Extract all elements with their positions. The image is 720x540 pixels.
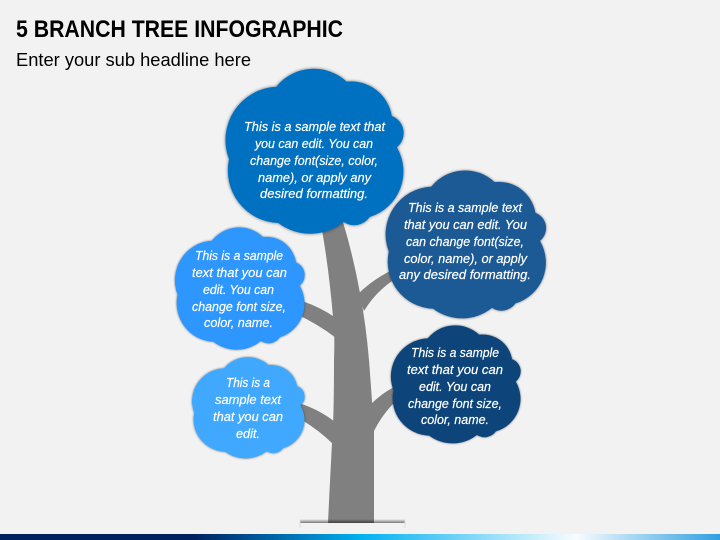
ground base bbox=[300, 519, 406, 528]
cloud text: upper right bbox=[399, 201, 531, 282]
cloud text: top: you can edit. You can bbox=[254, 137, 373, 151]
cloud text: lower right: change font size, bbox=[408, 397, 502, 411]
cloud text: upper right: any desired formatting. bbox=[399, 268, 531, 282]
cloud: lower left bbox=[192, 357, 305, 458]
footer gradient bar bbox=[0, 534, 720, 540]
cloud: lower right bbox=[391, 325, 521, 443]
cloud text: lower left: that you can bbox=[213, 410, 283, 424]
subtitle: Enter your sub headline here bbox=[16, 50, 251, 70]
title: 5 BRANCH TREE INFOGRAPHIC bbox=[16, 16, 343, 43]
cloud text: middle left: text that you can bbox=[192, 266, 287, 280]
cloud: middle left bbox=[175, 227, 305, 350]
cloud text: lower left: edit. bbox=[236, 427, 260, 441]
cloud: top bbox=[225, 69, 404, 234]
tree trunk and branches bbox=[296, 222, 394, 523]
cloud text: upper right: color, name), or apply bbox=[404, 252, 528, 266]
cloud text: upper right: can change font(size, bbox=[406, 235, 524, 249]
cloud text: top bbox=[244, 120, 386, 201]
cloud text: middle left: color, name. bbox=[204, 316, 273, 330]
cloud text: upper right: that you can edit. You bbox=[404, 218, 527, 232]
cloud text: lower left: sample text bbox=[215, 393, 282, 407]
cloud text: lower right: This is a sample bbox=[411, 346, 499, 360]
cloud text: upper right: This is a sample text bbox=[408, 201, 523, 215]
cloud text: middle left: edit. You can bbox=[203, 283, 274, 297]
cloud text: top: desired formatting. bbox=[260, 187, 368, 201]
cloud text: lower right bbox=[407, 346, 503, 427]
cloud text: top: name), or apply any bbox=[258, 171, 372, 185]
cloud text: lower right: text that you can bbox=[407, 363, 503, 377]
cloud text: top: change font(size, color, bbox=[250, 154, 378, 168]
cloud: upper right bbox=[386, 170, 546, 318]
cloud text: middle left bbox=[192, 249, 287, 330]
cloud text: middle left: This is a sample bbox=[195, 249, 283, 263]
cloud text: top: This is a sample text that bbox=[244, 120, 386, 134]
cloud text: lower left: This is a bbox=[226, 376, 270, 390]
cloud text: lower right: edit. You can bbox=[419, 380, 491, 394]
cloud text: lower right: color, name. bbox=[421, 413, 489, 427]
cloud text: middle left: change font size, bbox=[192, 300, 286, 314]
cloud text: lower left bbox=[213, 376, 283, 441]
